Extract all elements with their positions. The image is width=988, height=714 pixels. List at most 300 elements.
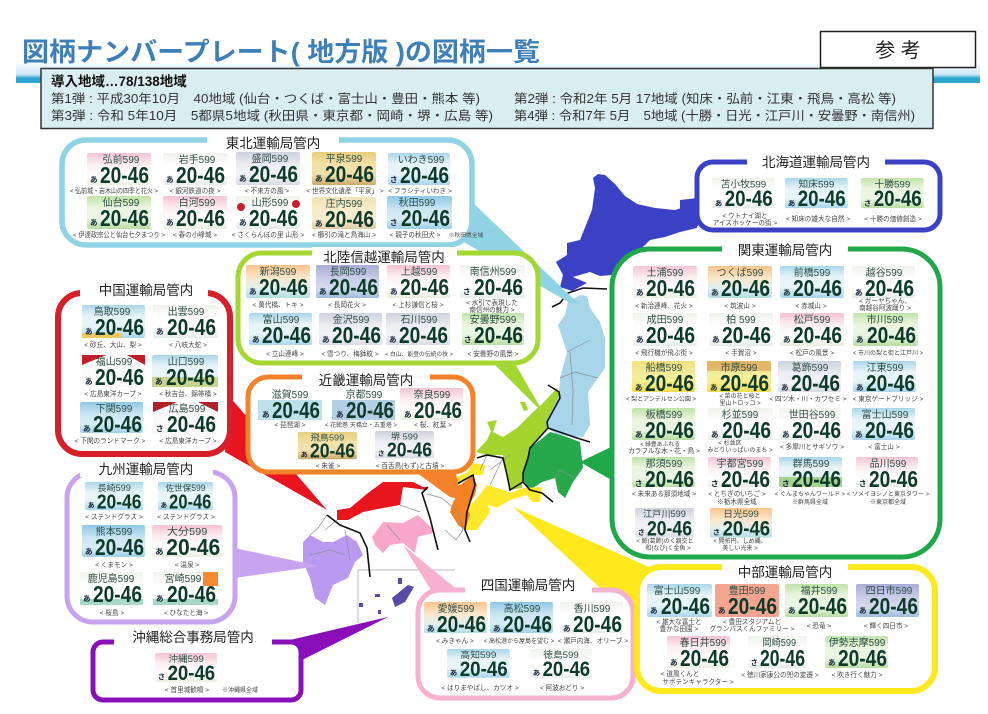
plate: 葛飾: あ [781, 383, 788, 392]
plate: 富士山 [647, 584, 712, 619]
plate: 市川 [853, 313, 918, 348]
caption: 高松: < 高松港から屋島を望む > [484, 637, 555, 645]
plate: 船橋: あ [635, 383, 642, 392]
caption: 岩手: < 銀河鉄道の夜 > [170, 186, 221, 195]
plate: 熊本: 20-46 [95, 534, 144, 560]
plate: 長崎: 長崎599 [97, 482, 131, 493]
plate: 秋田: さ [390, 218, 398, 227]
plate: 日光: 日光599 [723, 508, 759, 520]
plate: 杉並 [708, 408, 773, 443]
plate: 那須: さ [635, 479, 642, 488]
caption: 庄内: < 櫛引の滝と鳥海山 > [312, 230, 376, 239]
plate: 京都: 京都599 [346, 389, 383, 401]
caption: 伊勢志摩: < 吹き行く魅力 > [832, 670, 883, 679]
plate: 江戸川: 江戸川599 [643, 509, 686, 519]
plate: 市原: 20-46 [720, 370, 769, 396]
plate: 福井: 20-46 [798, 593, 847, 619]
plate: 成田: 成田599 [647, 314, 684, 326]
plate: 柏: 20-46 [722, 322, 771, 348]
plate: 飛鳥: 20-46 [310, 440, 355, 462]
caption: 長崎: < ステンドグラス > [85, 512, 143, 521]
panel: Chugoku [58, 283, 230, 454]
plate: 知床: 知床599 [798, 179, 834, 190]
caption: 那須: < 未来ある那須地域 > [632, 489, 696, 498]
plate: 安曇野: 安曇野599 [470, 314, 517, 326]
plate: 京都 [332, 388, 395, 423]
caption: 平泉: < 世界文化遺産「平泉」 > [306, 186, 384, 195]
plate: 岡崎: 岡崎599 [762, 637, 796, 649]
panel: Hokuriku-Shinetsu [238, 247, 538, 363]
plate: 品川: 20-46 [869, 466, 918, 492]
plate: いわき: さ [390, 175, 398, 184]
plate: 佐世保: 佐世保599 [165, 482, 206, 493]
plate: 弘前: あ [90, 175, 98, 184]
panel: Kanto [612, 243, 940, 557]
plate: 山形 [236, 196, 300, 231]
heading: Kyushu: 九州運輸局管内 [99, 462, 193, 477]
plate: 那須 [632, 457, 695, 492]
plate: 沖縄 [155, 653, 217, 685]
plate: 越谷: あ [855, 288, 862, 297]
plate: 宇都宮: さ [711, 479, 718, 488]
plate: 南信州: 南信州599 [470, 265, 517, 278]
plate: 弘前 [87, 153, 151, 188]
plate: 奈良 [400, 388, 463, 423]
Sado [520, 402, 528, 411]
plate: 大分: 大分599 [167, 525, 208, 538]
plate: 徳島: 20-46 [543, 657, 590, 681]
caption: 葛飾: < 四ツ木・川・カワセミ > [769, 394, 847, 403]
plate: 白河 [163, 196, 227, 231]
Chugoku [337, 482, 428, 520]
Okinawa islets [359, 578, 402, 614]
plate: 堺: さ [378, 449, 385, 458]
caption: 市原: < 菜の花と桜と [719, 392, 761, 400]
plate: 長岡: あ [319, 287, 326, 296]
plate: 鳥取 [82, 305, 145, 340]
plate: 南信州: さ [463, 287, 470, 296]
plate: 江戸川 [635, 508, 694, 541]
plate: 春日井 [667, 636, 730, 671]
caption: 日光: < 開拓円、しめ縄、 [713, 537, 767, 545]
plate: つくば: あ [711, 288, 718, 297]
plate: 下関: あ [83, 424, 90, 433]
caption: 江戸川: 和(なび)く金魚 > [645, 544, 691, 552]
plate: 盛岡: 20-46 [249, 161, 298, 187]
plate: 柏 [709, 313, 773, 348]
plate: 堺: 20-46 [387, 439, 432, 461]
plate: 秋田: 20-46 [401, 205, 450, 231]
plate: 宇都宮: 20-46 [721, 466, 770, 492]
caption: 群馬: < ぐんまちゃんワールド > [775, 491, 846, 498]
plate: 富士山: あ [650, 606, 658, 615]
caption: 広島: < 広島東洋カープ > [159, 436, 217, 445]
plate: 盛岡 [236, 152, 300, 187]
plate: 香川: あ [563, 624, 570, 633]
info panel [41, 68, 933, 128]
arrow: Chugoku [225, 395, 327, 510]
caption: 石川: < 白山、能登の伝統の技 > [385, 350, 454, 358]
plate: 宇都宮: 宇都宮599 [717, 457, 764, 470]
plate: 十勝: 20-46 [874, 187, 922, 211]
plate: 鹿児島: あ [83, 594, 90, 603]
plate: 南信州: 20-46 [474, 274, 523, 300]
caption: 堺: < 百舌鳥(もず)と古墳 > [376, 461, 444, 470]
plate: 滋賀: 滋賀599 [272, 388, 309, 401]
plate: 苫小牧: あ [715, 198, 722, 207]
caption: 春日井: < 道風くんと [661, 669, 699, 678]
plate: 山形: 山形599 [252, 197, 289, 209]
plate: 山形: 20-46 [249, 205, 298, 231]
plate: 四日市: 四日市599 [866, 584, 913, 597]
reference tag: 参 考 [875, 39, 921, 62]
note: 沖縄: ※沖縄県全域 [222, 686, 258, 694]
plate: 四日市: あ [859, 606, 866, 615]
plate: 石川: 20-46 [399, 322, 448, 348]
caption: 南信州: 南信州の魅力 > [469, 305, 515, 314]
plate: 富山: 富山599 [263, 313, 300, 326]
caption: 沖縄: < 首里城歓鳴 > [165, 685, 209, 694]
caption: 白河: < 春の小峰城 > [173, 230, 217, 239]
plate: 下関: 下関599 [96, 403, 133, 415]
caption: 豊田: グランパスくんファミリー > [710, 624, 795, 633]
plate: 飛鳥 [298, 432, 357, 462]
Hokuriku-Shinetsu [476, 388, 559, 490]
plate: 沖縄: さ [158, 672, 165, 681]
plate: 京都: あ [336, 410, 344, 419]
plate: 土浦: あ [636, 288, 644, 297]
caption: 板橋: < 緑豊あふれる [640, 440, 680, 448]
plate: 下関 [80, 402, 143, 437]
plate: 滋賀 [258, 388, 322, 423]
plate: 宮崎 [153, 572, 218, 607]
phase 1: 第1弾 : 平成30年10月 40地域 (仙台・つくば・富士山・豊田・熊本 等) [51, 91, 480, 106]
Shikoku [372, 515, 433, 553]
plate: 長崎: あ [88, 502, 95, 509]
plate: 杉並: 杉並599 [722, 408, 759, 421]
plate: 苫小牧: 20-46 [725, 187, 773, 211]
arrow: Hokuriku-Shinetsu [490, 360, 540, 407]
caption: 宇都宮: < とちぎのいちご > [708, 489, 766, 498]
plate: 船橋 [632, 361, 695, 396]
plate: 市川: 20-46 [867, 322, 916, 348]
plate: 鳥取: あ [85, 327, 92, 336]
plate: 那須: 那須599 [646, 458, 683, 470]
caption: 金沢: < 雪つり、梅鉢紋 > [321, 349, 379, 358]
caption: 苫小牧: < ウトナイ湖と [722, 211, 768, 220]
arrow: Kanto [580, 445, 615, 482]
Okinawa [392, 585, 414, 607]
plate: 大分: あ [155, 547, 164, 556]
plate: 下関: 20-46 [93, 411, 142, 437]
arrow: Tohoku [462, 200, 580, 305]
caption: 知床: < 知床の雄大な自然 > [786, 214, 850, 223]
plate: 庄内 [312, 197, 376, 232]
plate: 山口: 山口599 [168, 356, 205, 368]
plate: 盛岡: あ [239, 174, 246, 183]
plate: 岡崎 [748, 636, 807, 671]
plate: 土浦: 土浦599 [647, 266, 684, 279]
plate: 柏: あ [712, 335, 720, 344]
plate: 世田谷: 20-46 [792, 417, 841, 443]
plate: 広島 [153, 402, 218, 437]
plate: 京都: 20-46 [346, 397, 394, 423]
plate: 土浦: 20-46 [646, 275, 695, 301]
phase 3: 第3弾 : 令和 5年10月 5都県5地域 (秋田県・東京都・岡崎・堺・広島 等) [51, 108, 493, 123]
caption: 前橋: < 赤城山 > [795, 302, 827, 310]
plate: 熊本 [82, 525, 145, 560]
Chubu [465, 485, 542, 530]
plate: 前橋: 20-46 [793, 275, 842, 301]
plate: 愛媛: 20-46 [437, 611, 486, 637]
plate: 船橋: 20-46 [645, 370, 694, 396]
heading: Tohoku: 東北運輸局管内 [226, 136, 320, 151]
plate: 堺: 堺 599 [391, 431, 418, 441]
plate: 岩手: 20-46 [176, 162, 225, 188]
map of Japan [303, 174, 697, 623]
plate: 市原: 市原599 [721, 361, 758, 374]
plate: 出雲 [153, 305, 218, 340]
plate: 福山: あ [85, 377, 92, 386]
plate: つくば [708, 266, 772, 301]
plate: 市原 [707, 361, 771, 396]
caption: 品川: < ソメイヨシノと東京タワー > [847, 490, 930, 498]
plate: つくば: つくば599 [717, 267, 764, 279]
plate: 知床: あ [788, 198, 795, 207]
plate: 金沢: あ [322, 335, 330, 344]
caption: 日光: 美しい光来 > [722, 544, 758, 552]
plate: 熊本: あ [85, 547, 92, 556]
panel: Chubu [637, 561, 935, 691]
plate: 奈良: あ [404, 410, 412, 419]
caption: 長岡: < 長岡花火 > [328, 300, 366, 309]
caption: 香川: < 瀬戸内海、オリーブ > [558, 636, 628, 645]
plate: 板橋: 20-46 [645, 417, 694, 443]
plate: 江東: 20-46 [866, 370, 915, 396]
plate: 鳥取: 20-46 [95, 314, 144, 340]
plate: 宮崎: あ [156, 594, 164, 603]
plate: 鹿児島: 鹿児島599 [88, 572, 135, 585]
plate: 広島: 20-46 [167, 411, 216, 437]
plate: 庄内: あ [315, 219, 322, 228]
plate: 日光 [710, 508, 772, 540]
header band [16, 64, 980, 83]
plate: 豊田: あ [718, 606, 726, 615]
plate: 仙台 [87, 196, 151, 231]
info heading: 導入地域…78/138地域 [51, 73, 187, 89]
caption: 出雲: < 八岐大蛇 > [169, 340, 207, 349]
plate: 熊本: 熊本599 [96, 525, 133, 538]
plate: 福井: 福井599 [801, 584, 838, 597]
plate: 秋田 [387, 196, 452, 231]
plate: 上越: 上越599 [401, 265, 438, 278]
caption: 柏: < 手賀沼 > [725, 348, 757, 357]
plate: 秋田: 秋田599 [399, 196, 436, 209]
caption: 山口: < 秋吉台、錦帯橋 > [159, 389, 217, 398]
caption: 宇都宮: ※栃木県全域 [717, 497, 757, 506]
plate: 苫小牧: 苫小牧599 [720, 179, 766, 190]
caption: 新潟: < 萬代橋、トキ > [253, 300, 304, 309]
plate: 奈良: 20-46 [414, 397, 462, 423]
Kinki [450, 475, 477, 530]
plate: 高知 [447, 649, 510, 681]
plate: 松戸: あ [783, 335, 790, 344]
plate: 岩手: 岩手599 [179, 153, 216, 166]
plate: 豊田: 豊田599 [729, 584, 766, 597]
Kyushu [303, 535, 363, 605]
plate: 庄内: 20-46 [325, 206, 374, 232]
plate: 安曇野: さ [464, 335, 472, 344]
plate: 葛飾: 20-46 [791, 370, 840, 396]
plate: 高松 [490, 602, 553, 637]
heading: Hokuriku-Shinetsu: 北陸信越運輸局管内 [323, 250, 445, 265]
caption: 杉並: < 杉並区 [718, 439, 742, 447]
plate: 香川 [560, 602, 623, 637]
plate: 石川: あ [389, 335, 396, 344]
plate: 香川: 香川599 [574, 603, 611, 615]
plate: 富山: あ [252, 335, 260, 344]
caption: 富士山: < 富士山 > [868, 442, 900, 451]
plate: 奈良: 奈良599 [414, 388, 451, 401]
plate: 那須: 20-46 [645, 466, 694, 492]
plate: 長岡: 長岡599 [330, 266, 367, 278]
caption: 富士山: < 雄大な富士と [656, 617, 702, 626]
panel: Okinawa [93, 630, 301, 700]
caption: 大分: < 温泉 > [175, 560, 199, 569]
plate: 長岡 [316, 265, 379, 300]
plate: 岩手: あ [166, 175, 174, 184]
plate: 越谷: 越谷599 [866, 266, 903, 279]
plate: 群馬: さ [782, 479, 790, 488]
title: 図柄ナンバープレート( 地方版 )の図柄一覧 [22, 37, 540, 67]
plate: 徳島: 徳島599 [543, 649, 579, 660]
plate: 江東: 江東599 [867, 361, 904, 374]
plate: 高知: 高知599 [460, 649, 496, 660]
plate: 金沢 [319, 313, 382, 348]
plate: 新潟 [246, 265, 310, 300]
plate: 群馬: 20-46 [792, 466, 841, 492]
caption: 熊本: < くまモン > [95, 561, 133, 569]
plate: 伊勢志摩: あ [828, 658, 836, 667]
plate: 山口: 20-46 [166, 364, 215, 390]
caption: いわき: < フラシティいわき > [388, 187, 452, 195]
plate: 苫小牧 [712, 178, 775, 211]
plate: 群馬 [779, 457, 842, 492]
caption: 松戸: < 松戸の風景 > [790, 348, 834, 357]
plate: 土浦 [633, 266, 697, 301]
plate: 松戸 [780, 313, 844, 348]
caption: 高知: < はりまやばし、カツオ > [441, 683, 519, 692]
plate: 出雲: あ [156, 327, 164, 336]
plate: 世田谷 [779, 408, 841, 443]
plate: 鹿児島 [80, 572, 143, 607]
caption: 京都: < 花絵巻 天橋立・五重塔 > [325, 421, 397, 429]
caption: 福山: < 広島東洋カープ > [84, 389, 142, 398]
plate: 長崎: 20-46 [97, 491, 141, 513]
plate: 高松: 高松599 [504, 602, 541, 615]
plate: 伊勢志摩 [825, 636, 888, 671]
caption: 春日井: サボテンキャラクター > [662, 677, 734, 686]
plate: 伊勢志摩: 20-46 [838, 645, 887, 671]
plate: 十勝: 十勝599 [874, 179, 910, 190]
plate: 江戸川: 20-46 [647, 516, 692, 541]
plate: 滋賀: あ [262, 410, 270, 419]
plate: 沖縄: 沖縄599 [168, 653, 204, 664]
caption: 豊田: < 豊田スタジアムと [723, 617, 781, 626]
plate: 高松: あ [493, 624, 500, 633]
plate: 安曇野: 20-46 [474, 322, 523, 348]
caption: 板橋: カラフルな木・花・鳥 > [628, 446, 700, 455]
plate: 江東: あ [856, 383, 864, 392]
plate: 葛飾 [778, 361, 841, 396]
plate: 福山: 20-46 [95, 364, 144, 390]
plate: 知床: 20-46 [798, 187, 846, 211]
heading: Chubu: 中部運輸局管内 [738, 565, 832, 580]
plate: 富士山: 20-46 [661, 593, 710, 619]
Kanto [523, 432, 583, 498]
caption: 十勝: < 十勝の価値創造 > [864, 214, 922, 223]
plate: 品川: さ [859, 479, 866, 488]
plate: 盛岡: 盛岡599 [252, 152, 289, 165]
plate: 長崎 [85, 482, 143, 513]
caption: 山形: < さくらんぼの里 山形 > [232, 231, 304, 239]
caption: 苫小牧: アイスホッケーの街 > [713, 218, 777, 227]
plate: 春日井: 春日井599 [680, 636, 727, 649]
plate: 佐世保 [158, 482, 213, 513]
plate: 伊勢志摩: 伊勢志摩599 [829, 636, 886, 649]
plate: 広島: さ [156, 424, 164, 433]
plate: 白河: あ [166, 218, 174, 227]
caption: 船橋: < 梨とアンデルセン公園 > [626, 395, 697, 403]
plate: 大分: 20-46 [166, 535, 220, 561]
arrow: Kinki [413, 470, 462, 500]
plate: 群馬: 群馬599 [793, 457, 830, 470]
heading: Kanto: 関東運輸局管内 [738, 243, 832, 258]
plate: 世田谷: 世田谷599 [789, 409, 836, 421]
caption: 富山: < 立山連峰 > [266, 349, 304, 358]
Hokkaido [556, 174, 697, 291]
plate: 平泉: 平泉599 [326, 152, 363, 165]
plate: 新潟: 20-46 [259, 274, 308, 300]
plate: 豊田 [715, 584, 779, 619]
caption: 盛岡: < 不来方の風 > [245, 186, 289, 195]
arrow: Okinawa [290, 617, 388, 662]
plate: 佐世保: あ [161, 501, 167, 510]
caption: 宮崎: < ひなたと海 > [164, 608, 208, 617]
plate: 山口: あ [155, 377, 162, 386]
caption: 奈良: < 桜、紅葉 > [414, 420, 452, 429]
plate: 鳥取: 鳥取599 [94, 305, 131, 318]
plate: 高松: 20-46 [503, 611, 552, 637]
arrow: Chubu [513, 507, 660, 625]
plate: 福井: あ [788, 606, 796, 615]
plate: 上越: あ [390, 287, 398, 296]
panel: Shikoku [418, 578, 633, 698]
plate: 杉並: 20-46 [722, 417, 771, 443]
plate: 愛媛: 愛媛599 [438, 602, 475, 615]
caption: 江戸川: < 鯨(葛飾)のく親交と [636, 537, 694, 545]
plate: 成田: 20-46 [646, 322, 695, 348]
phase 4: 第4弾 : 令和7年 5月 5地域 (十勝・日光・江戸川・安曇野・南信州) [514, 108, 915, 123]
plate: 大分 [152, 525, 222, 561]
caption: 滋賀: < 琵琶湖 > [274, 420, 306, 429]
plate: 春日井: 20-46 [680, 645, 729, 671]
plate: 富士山: あ [855, 430, 862, 439]
heading: Kinki: 近畿運輸局管内 [319, 373, 413, 388]
caption: 岡崎: < 徳川家康公の兜の変遷 > [741, 670, 819, 679]
plate: 江東 [853, 361, 916, 396]
plate: 南信州 [460, 265, 525, 300]
